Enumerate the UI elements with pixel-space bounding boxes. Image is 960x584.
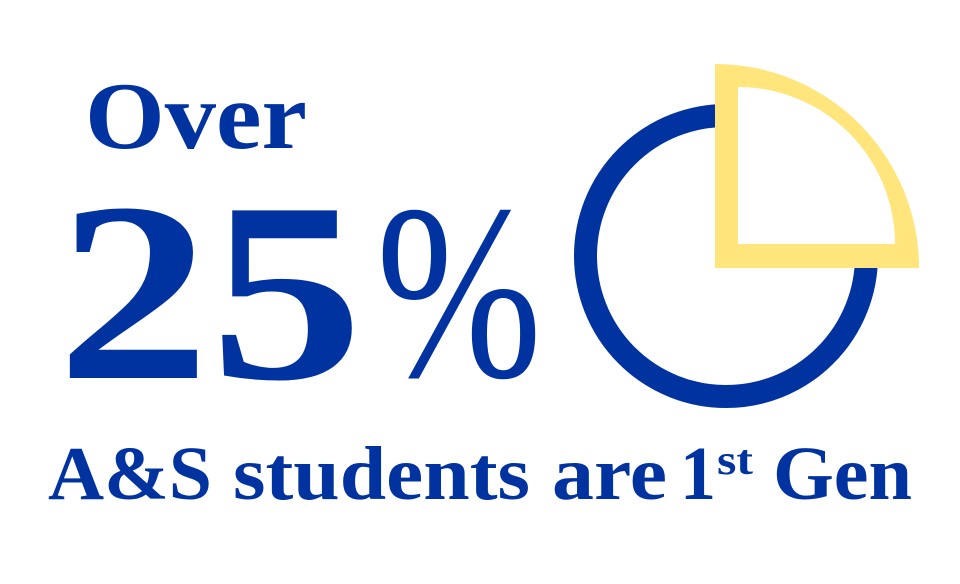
caption: A&S students are 1st Gen: are: [552, 432, 667, 516]
yellow quarter slice: [715, 64, 919, 268]
caption: A&S students are 1st Gen: Gen: [773, 432, 912, 516]
caption: A&S students are 1st Gen: 1: [680, 432, 716, 516]
caption: A&S students are 1st Gen: students: [233, 432, 530, 516]
caption: A&S students are 1st Gen: st: [717, 438, 753, 484]
white slice interior: [738, 87, 895, 244]
caption: A&S students are 1st Gen: A&S: [48, 432, 212, 516]
statistic: 25%: 25: [57, 151, 363, 434]
pie chart icon: [586, 64, 919, 396]
statistic: 25%: %: [376, 154, 542, 431]
statistic: 25%: [57, 151, 542, 434]
blue ring: [586, 116, 866, 396]
heading: Over: Over: [85, 63, 307, 169]
caption: A&S students are 1st Gen: [48, 432, 912, 516]
